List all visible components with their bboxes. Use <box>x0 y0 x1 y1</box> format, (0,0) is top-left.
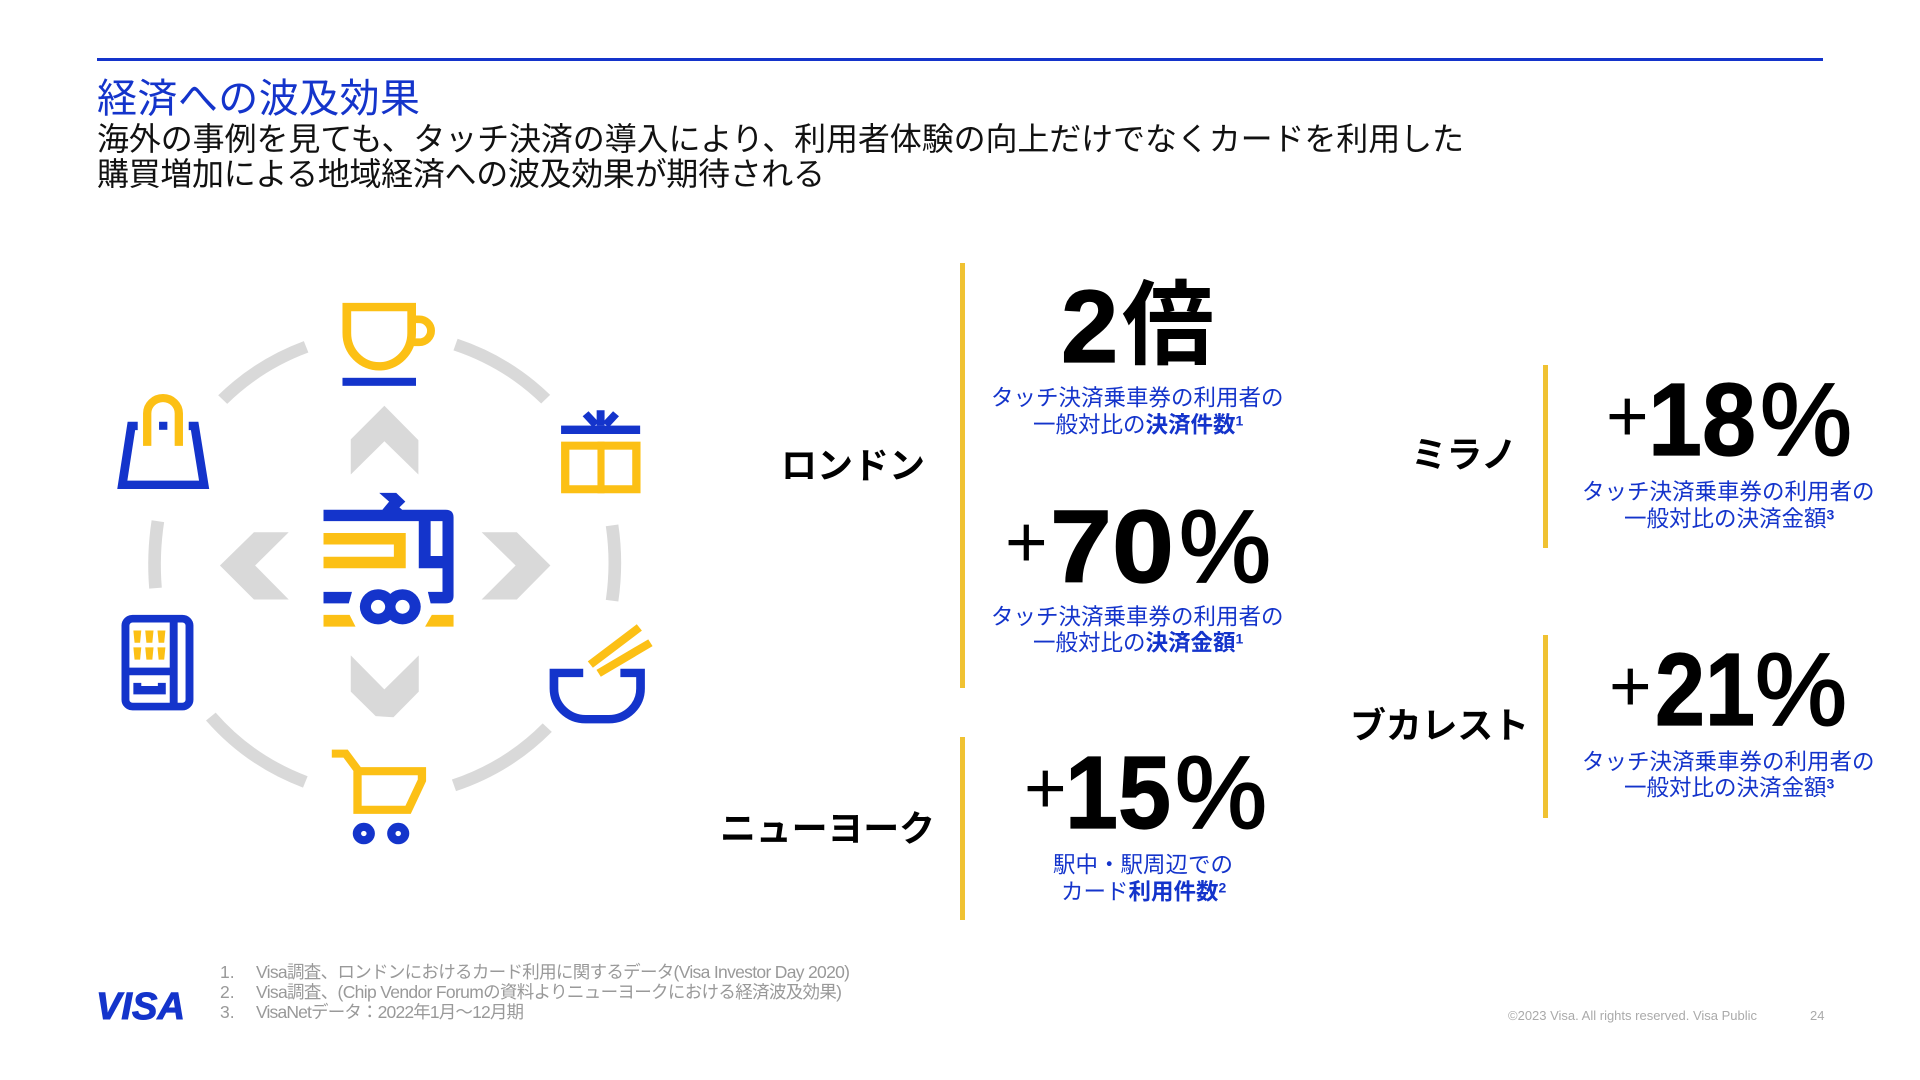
stat: 2x <box>1061 269 1214 384</box>
stat: +21%: % <box>1755 632 1847 747</box>
subtitle text <box>97 121 1464 192</box>
caption: +21%: タッチ決済乗車券の利用者の <box>1582 750 1875 774</box>
caption: +70% <box>991 604 1284 656</box>
stat: +15%: 15 <box>1065 735 1171 850</box>
stat: +15%: + <box>1024 748 1067 829</box>
caption: +18%: タッチ決済乗車券の利用者の <box>1582 480 1875 504</box>
city label: Milan: ミラノ <box>1411 434 1517 475</box>
stat: +70% <box>1005 489 1271 604</box>
footnotes: 2. <box>220 982 235 1002</box>
stat: +70%: 70 <box>1050 489 1174 604</box>
stat: +70%: + <box>1005 502 1048 583</box>
caption: 2x: 1 <box>1236 412 1244 428</box>
icon: noodle bowl <box>554 627 650 719</box>
caption: +15%: カード利用件数 <box>1061 880 1219 904</box>
footnotes: 3. <box>220 1002 235 1022</box>
caption: +70%: 一般対比の決済金額 <box>1033 630 1236 656</box>
icon: shopping cart <box>332 754 422 840</box>
footnotes: 1. <box>220 962 235 982</box>
stat: +18%: % <box>1760 362 1852 477</box>
footnotes: VisaNetデータ：2022年1月～12月期 <box>256 1002 524 1022</box>
stat: +21%: + <box>1609 646 1652 727</box>
icon: vending machine <box>125 619 189 707</box>
title: 経済への波及効果 <box>97 77 420 121</box>
panel: London <box>781 263 1284 688</box>
panel: New York <box>720 735 1267 920</box>
logo: Visa: VISA <box>96 986 185 1028</box>
city label: New York: ニューヨーク <box>720 808 935 849</box>
icon: gift box <box>561 410 640 493</box>
icon: shopping bag <box>122 398 204 485</box>
caption: 2x: タッチ決済乗車券の利用者の <box>991 386 1284 410</box>
stat: +21%: 21 <box>1655 632 1755 747</box>
caption: 2x: 一般対比の決済件数 <box>1033 412 1236 438</box>
page number: 24 <box>1810 1008 1824 1023</box>
subtitle text: 購買増加による地域経済への波及効果が期待される <box>97 156 825 192</box>
arrows: four grey chevrons <box>220 406 550 717</box>
caption: 2x <box>991 386 1284 438</box>
footnotes: Visa調査、ロンドンにおけるカード利用に関するデータ(Visa Investor Day 2020) <box>256 962 850 982</box>
diagram: transit spending ripple circle <box>122 307 650 840</box>
caption: +15% <box>1053 852 1233 904</box>
panel: Bucharest <box>1350 632 1875 818</box>
ring segments <box>155 345 615 785</box>
caption: +21%: 3 <box>1827 776 1835 792</box>
caption: +70%: 1 <box>1236 630 1244 646</box>
stat: +21% <box>1609 632 1847 747</box>
caption: +21% <box>1582 750 1875 800</box>
footnotes: Visa調査、(Chip Vendor Forumの資料よりニューヨークにおける経済波及効果) <box>256 982 842 1002</box>
stat: 2x: 倍 <box>1122 275 1214 377</box>
caption: +18% <box>1582 480 1875 532</box>
caption: +18%: 一般対比の決済金額 <box>1624 506 1827 532</box>
footnotes <box>220 962 850 1022</box>
stat: +15% <box>1024 735 1267 850</box>
city label: London: ロンドン <box>781 445 925 486</box>
stat: +18%: + <box>1606 376 1649 457</box>
stat: +18%: 18 <box>1648 362 1756 477</box>
stat: +15%: % <box>1175 735 1267 850</box>
copyright: ©2023 Visa. All rights reserved. Visa Public <box>1508 1008 1758 1023</box>
caption: +21%: 一般対比の決済金額 <box>1624 776 1827 800</box>
caption: +15%: 駅中・駅周辺での <box>1053 852 1233 878</box>
stat: +70%: % <box>1179 489 1271 604</box>
subtitle text: 海外の事例を見ても、タッチ決済の導入により、利用者体験の向上だけでなくカードを利用した <box>97 121 1464 157</box>
city label: Bucharest: ブカレスト <box>1350 705 1529 746</box>
caption: +70%: タッチ決済乗車券の利用者の <box>991 604 1284 630</box>
icon: coffee cup <box>342 307 431 386</box>
icon: train <box>324 493 454 627</box>
caption: +15%: 2 <box>1219 880 1227 896</box>
caption: +18%: 3 <box>1827 506 1835 522</box>
stat: 2x: 2 <box>1061 269 1118 384</box>
stat: +18% <box>1606 362 1852 477</box>
panel: Milan <box>1411 362 1875 548</box>
